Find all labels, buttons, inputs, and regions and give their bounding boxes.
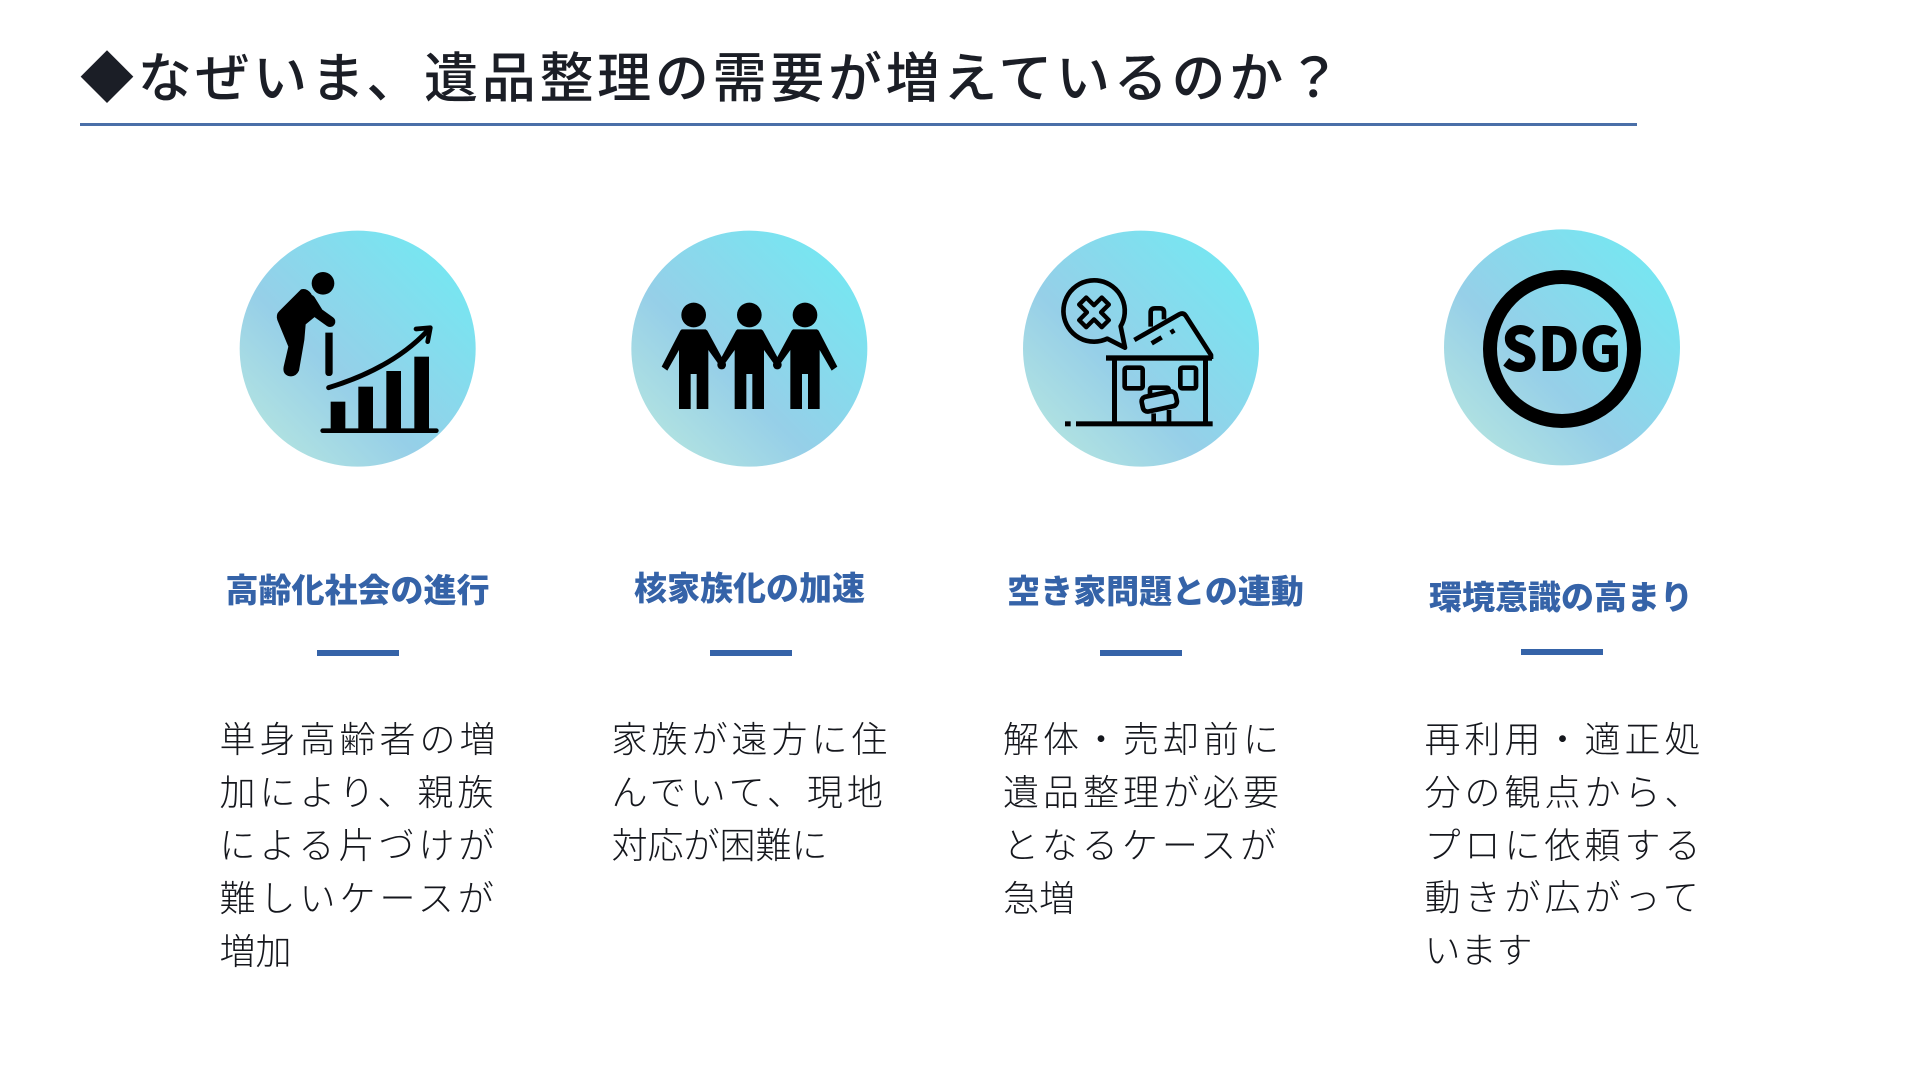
- icon: SDG ring: [1444, 229, 1680, 466]
- text block: [1003, 719, 1283, 919]
- panel: environmental awareness: 再利用・適正処: [1424, 719, 1705, 760]
- panel: vacant houses: 急増: [1003, 878, 1075, 919]
- icon: vacant house with speech bubble: [1023, 230, 1259, 467]
- heading: 高齢化社会の進行: [226, 572, 490, 609]
- panel: environmental awareness: [1424, 579, 1705, 971]
- panel: aging society: 加により、親族: [220, 772, 497, 813]
- heading: 環境意識の高まり: [1429, 579, 1693, 616]
- panel: aging society: による片づけが: [220, 825, 498, 866]
- panel: vacant houses: [1003, 573, 1304, 919]
- panel: environmental awareness: います: [1424, 930, 1533, 971]
- icon: SDG ring: SDG: [1501, 302, 1622, 389]
- panel: aging society: [220, 572, 500, 972]
- panel: vacant houses: 遺品整理が必要: [1003, 772, 1283, 813]
- text block: [612, 719, 892, 866]
- panel: nuclear family: 対応が困難に: [612, 825, 828, 866]
- panel: nuclear family: んでいて、現地: [612, 772, 887, 813]
- heading: 空き家問題との連動: [1007, 573, 1304, 610]
- text block: [1424, 719, 1705, 971]
- panel: nuclear family: 家族が遠方に住: [612, 719, 892, 760]
- panel: nuclear family: [612, 570, 892, 866]
- panel: environmental awareness: 動きが広がって: [1424, 877, 1703, 918]
- text block: [220, 719, 500, 972]
- panel: vacant houses: 解体・売却前に: [1003, 719, 1283, 760]
- icon: senior and rising bar chart: [240, 230, 476, 467]
- panel: aging society: 増加: [220, 931, 292, 972]
- panel: environmental awareness: 分の観点から、: [1424, 772, 1705, 813]
- panel: vacant houses: となるケースが: [1003, 825, 1280, 866]
- panel: environmental awareness: プロに依頼する: [1424, 825, 1705, 866]
- heading: 核家族化の加速: [634, 570, 865, 607]
- panel: aging society: 難しいケースが: [220, 878, 498, 919]
- icon: three people holding hands: [631, 230, 868, 467]
- title: ◆なぜいま、遺品整理の需要が増えているのか？: [80, 49, 1345, 109]
- panel: aging society: 単身高齢者の増: [220, 719, 500, 760]
